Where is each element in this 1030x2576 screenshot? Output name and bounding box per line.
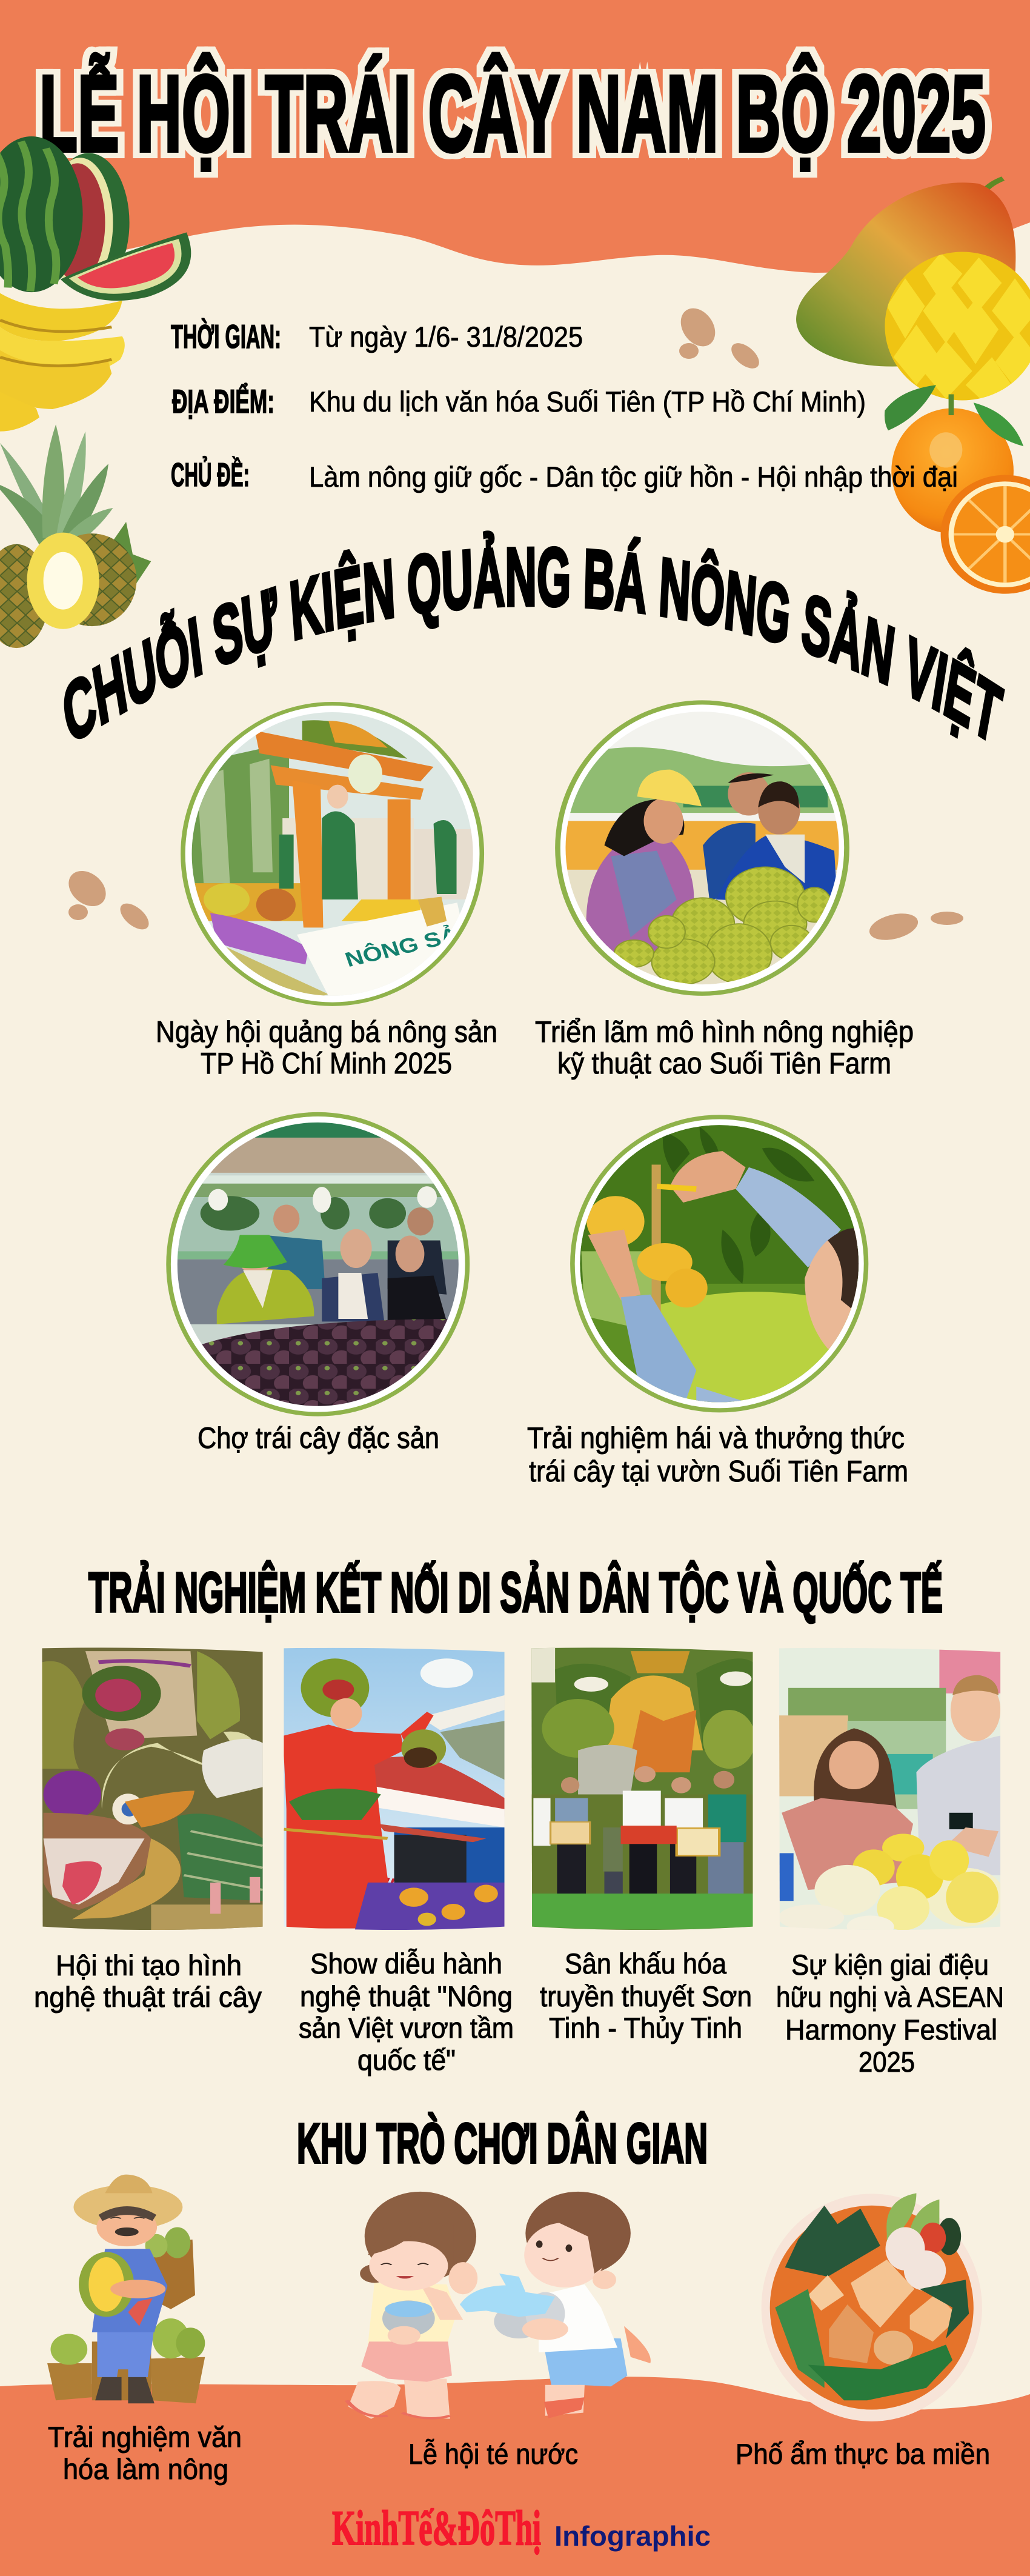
- photo circle: agricultural promotion day: [181, 702, 484, 1008]
- caption: agricultural promotion day: [156, 1016, 497, 1080]
- caption: parade show: sản Việt vươn tầm: [299, 2012, 514, 2044]
- decorative blobs right: [866, 909, 963, 944]
- caption: agricultural promotion day: TP Hồ Chí Minh 2025: [201, 1047, 452, 1080]
- icon: mango and cube: [796, 179, 1030, 404]
- info row: time: Từ ngày 1/6- 31/8/2025: [309, 321, 583, 353]
- mango cube: [880, 250, 1030, 404]
- icon: watermelon: [0, 136, 191, 301]
- caption: Son Tinh Thuy Tinh staging: truyền thuyết Sơn: [540, 1980, 752, 2012]
- info row: theme: CHỦ ĐỀ:: [171, 456, 250, 493]
- icon: orange and slice: [885, 385, 1030, 594]
- caption: farming culture experience: [48, 2421, 242, 2485]
- caption: fruit art contest: nghệ thuật trái cây: [34, 1981, 262, 2013]
- decorative blobs top: [674, 302, 763, 373]
- curved heading: CHUỖI SỰ KIỆN QUẢNG BÁ NÔNG SẢN VIỆT: [64, 530, 1005, 741]
- icon: children splashing water: [347, 2192, 651, 2419]
- info row: theme: Làm nông giữ gốc - Dân tộc giữ hồn - Hội nhập thời đại: [309, 461, 958, 493]
- photo circle: agricultural promotion day: NÔNG SẢN: [342, 919, 479, 971]
- photo: parade show: TIEN THEME PARK: [315, 1866, 487, 1904]
- caption: farming culture experience: Trải nghiệm văn: [48, 2421, 242, 2453]
- caption: friendship melody: 2025: [859, 2046, 915, 2078]
- icon: pineapple: [0, 424, 151, 648]
- info row: time: [171, 318, 583, 355]
- caption: parade show: nghệ thuật "Nông: [300, 1980, 513, 2012]
- caption: fruit art contest: Hội thi tạo hình: [56, 1949, 242, 1981]
- caption: water festival: Lễ hội té nước: [408, 2438, 578, 2470]
- info row: location: [172, 382, 866, 420]
- photo: Son Tinh Thuy Tinh stage: [529, 1646, 756, 1932]
- caption: fruit art contest: [34, 1949, 262, 2013]
- caption: agricultural promotion day: Ngày hội quảng bá nông sản: [156, 1016, 497, 1049]
- caption: high-tech farm exhibition: [535, 1016, 914, 1080]
- photo circle: fruit-picking experience: [570, 1115, 868, 1412]
- caption: parade show: [299, 1947, 514, 2076]
- caption: friendship melody: [776, 1949, 1004, 2078]
- caption: farming culture experience: hóa làm nông: [63, 2453, 228, 2485]
- caption: Son Tinh Thuy Tinh staging: Sân khấu hóa: [565, 1947, 727, 1980]
- caption: three-regions food street: Phố ẩm thực ba miền: [736, 2438, 990, 2470]
- top orange wave band: [0, 0, 1030, 273]
- decorative blobs left: [62, 864, 153, 934]
- watermelon slice: [61, 232, 191, 301]
- caption: high-tech farm exhibition: Triển lãm mô hình nông nghiệp: [535, 1016, 914, 1049]
- caption: Son Tinh Thuy Tinh staging: [540, 1947, 752, 2044]
- icon: three-regions food bowl: [762, 2193, 982, 2421]
- caption: friendship melody: Harmony Festival: [785, 2014, 997, 2046]
- caption: friendship melody: Sự kiện giai điệu: [791, 1949, 989, 1981]
- orange slice: [941, 475, 1030, 594]
- bottom orange wave band: [0, 2377, 1030, 2576]
- info row: time: THỜI GIAN:: [171, 318, 281, 355]
- photo: friendship melody and ASEAN festival: [775, 1646, 1005, 1938]
- caption: fruit-picking experience: trái cây tại vườn Suối Tiên Farm: [529, 1455, 908, 1488]
- caption: high-tech farm exhibition: kỹ thuật cao Suối Tiên Farm: [557, 1047, 891, 1080]
- info row: location: ĐỊA ĐIỂM:: [172, 382, 274, 420]
- caption: fruit-picking experience: [527, 1422, 908, 1488]
- heading: folk games: KHU TRÒ CHƠI DÂN GIAN: [297, 2112, 708, 2175]
- caption: Son Tinh Thuy Tinh staging: Tinh - Thủy Tinh: [549, 2012, 742, 2044]
- icon: farmer with durians: [47, 2175, 205, 2403]
- info row: theme: [171, 456, 958, 493]
- photo: parade show: [282, 1646, 506, 1932]
- icon: bananas: [0, 293, 125, 432]
- photo circle: high-tech farm exhibition: [555, 700, 849, 996]
- photo circle: specialty fruit market: [166, 1112, 470, 1416]
- photo: fruit art dragon: [39, 1646, 266, 1932]
- caption: friendship melody: hữu nghị và ASEAN: [776, 1981, 1004, 2013]
- logo: Infographic: [554, 2520, 711, 2552]
- caption: parade show: Show diễu hành: [310, 1947, 502, 1980]
- caption: specialty fruit market: Chợ trái cây đặc sản: [198, 1422, 439, 1455]
- logo: KinhTế&ĐôThị: [332, 2500, 541, 2555]
- info row: location: Khu du lịch văn hóa Suối Tiên (TP Hồ Chí Minh): [309, 385, 866, 418]
- caption: fruit-picking experience: Trải nghiệm hái và thưởng thức: [527, 1422, 905, 1455]
- caption: parade show: quốc tế": [357, 2044, 456, 2076]
